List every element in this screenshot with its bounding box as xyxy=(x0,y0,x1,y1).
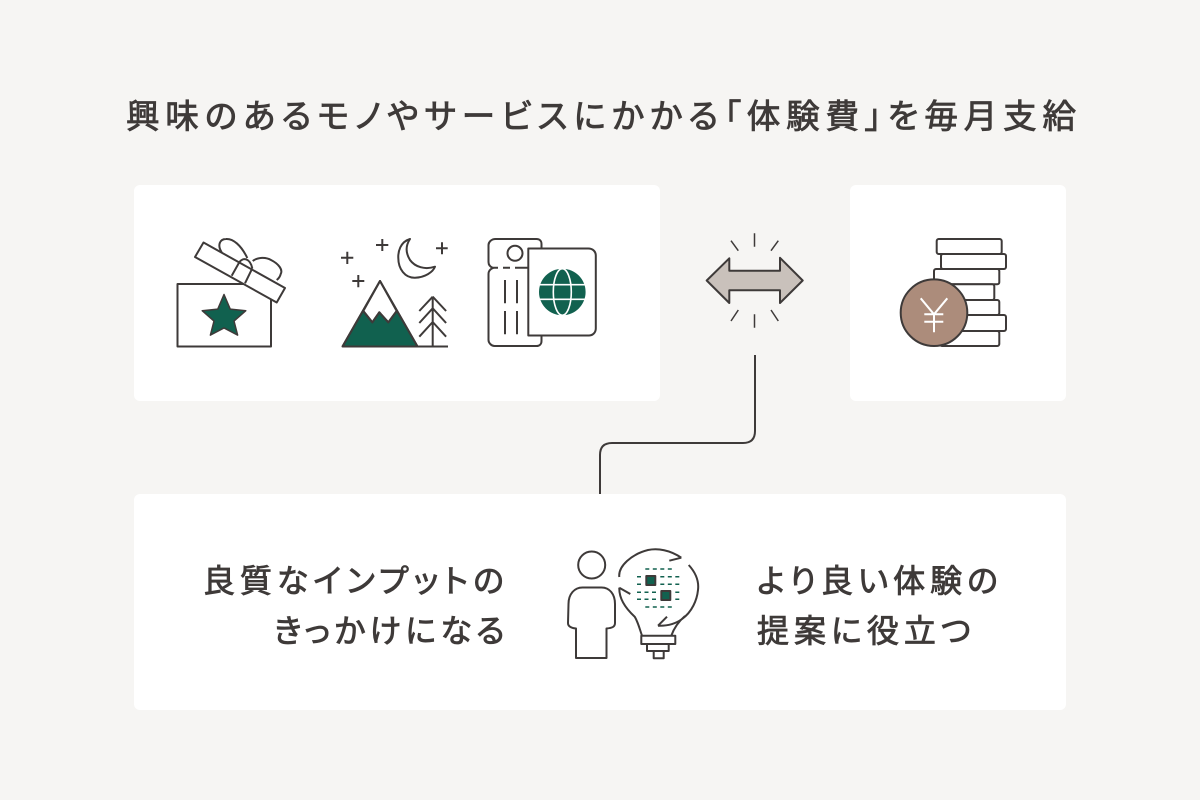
text: proposal xyxy=(757,563,1003,649)
text: proposal: 提案に役立つ xyxy=(757,613,976,649)
icon: double arrow xyxy=(707,233,803,328)
panel: experiences xyxy=(134,185,660,401)
title: 興味のあるモノやサービスにかかる「体験費」を毎月支給 xyxy=(126,99,1082,136)
panel: benefits xyxy=(134,494,1066,710)
icon: gift box xyxy=(178,239,285,346)
icon: person and light bulb xyxy=(568,549,698,658)
icon: ticket and passport xyxy=(488,239,596,346)
icon: coins xyxy=(901,239,1006,346)
connector line xyxy=(600,355,755,494)
panel: coins xyxy=(850,185,1066,401)
icon: mountain night xyxy=(341,239,448,346)
text: proposal: より良い体験の xyxy=(757,563,1003,599)
text: input xyxy=(203,563,509,649)
text: input: きっかけになる xyxy=(274,613,509,649)
text: input: 良質なインプットの xyxy=(203,563,509,599)
